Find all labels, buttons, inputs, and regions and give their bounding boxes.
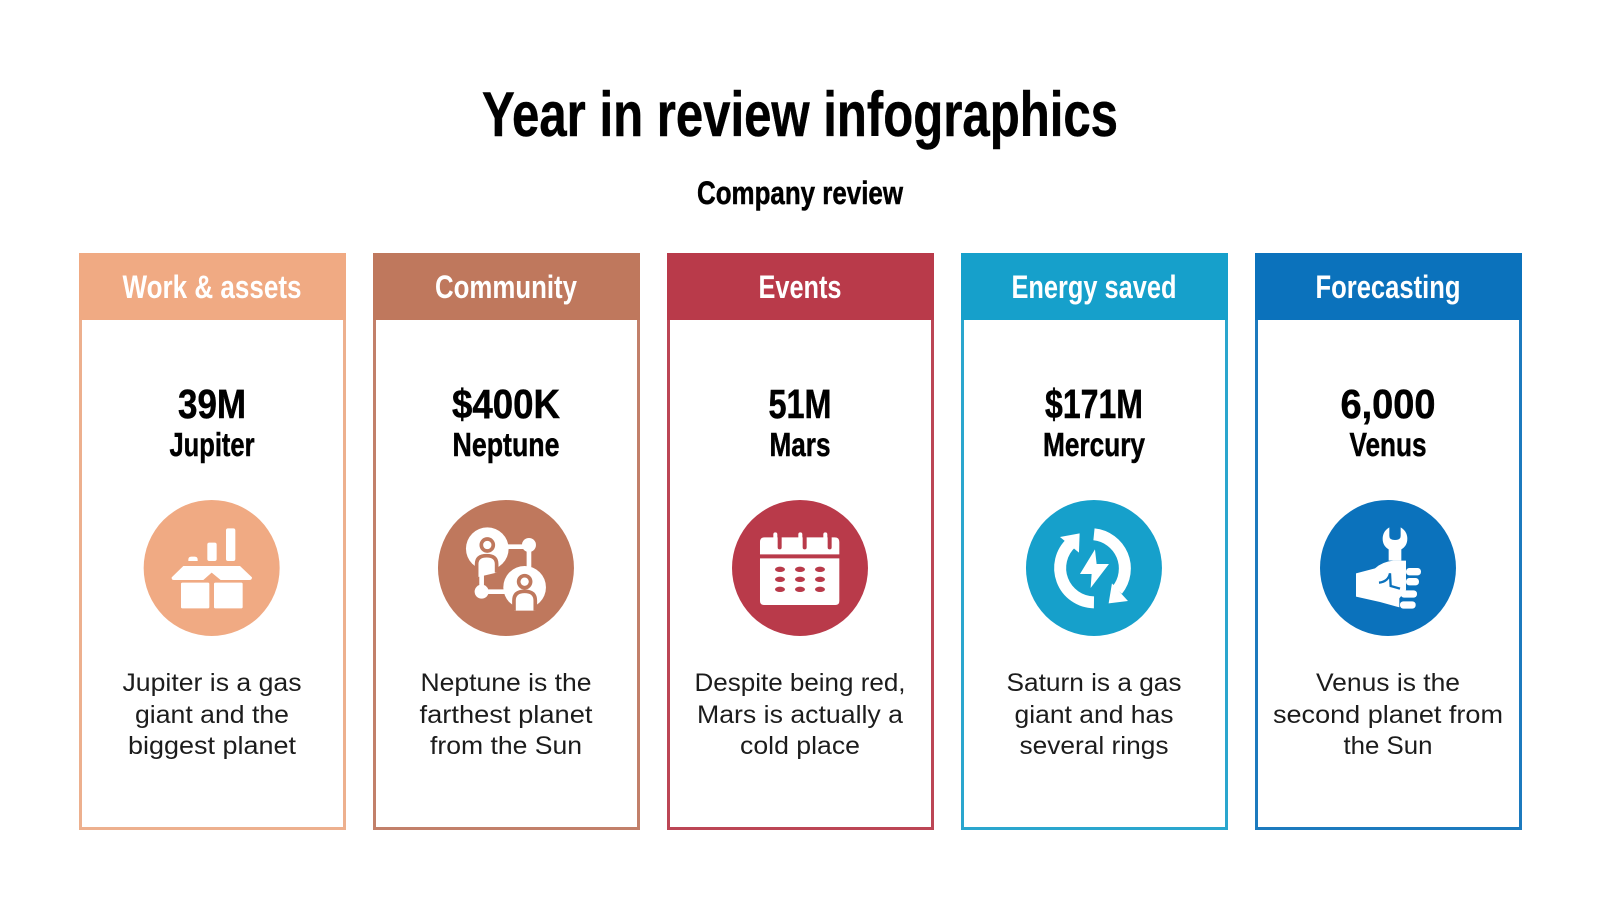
panel: work and assets — [79, 253, 346, 828]
description: several rings — [1020, 732, 1168, 760]
panel: events — [667, 253, 934, 828]
stat: $171M Mercury: $171M — [1045, 381, 1143, 427]
description: cold place — [740, 732, 860, 760]
stat: 39M Jupiter: Jupiter — [170, 426, 255, 463]
header: community: Community — [435, 269, 577, 305]
header: community — [373, 253, 640, 320]
icon: connected people — [438, 500, 574, 636]
stat: 6,000 Venus: Venus — [1350, 426, 1426, 463]
stat: $171M Mercury — [1043, 381, 1146, 463]
description — [694, 669, 906, 760]
panel: energy saved — [961, 253, 1228, 828]
stat: 51M Mars: 51M — [768, 381, 832, 427]
header: work and assets — [79, 253, 346, 320]
description: the Sun — [1344, 732, 1432, 760]
description — [420, 669, 593, 760]
description: Jupiter is a gas — [122, 669, 302, 697]
icon: energy cycle — [1026, 500, 1162, 636]
stat: 6,000 Venus — [1340, 381, 1436, 463]
header: energy saved: Energy saved — [1012, 269, 1176, 305]
icon: hand holding wrench — [1320, 500, 1456, 636]
header: forecasting: Forecasting — [1316, 269, 1460, 305]
description: Saturn is a gas — [1006, 669, 1182, 697]
subtitle: Company review — [697, 175, 903, 211]
stat: 51M Mars — [768, 381, 832, 463]
header: forecasting — [1255, 253, 1522, 320]
description — [1006, 669, 1182, 760]
stat: $171M Mercury: Mercury — [1043, 426, 1146, 463]
description: giant and the — [135, 701, 289, 729]
header: events — [667, 253, 934, 320]
stat: $400K Neptune — [452, 381, 560, 463]
description — [1273, 669, 1503, 760]
description: Despite being red, — [694, 669, 906, 697]
stat: $400K Neptune: $400K — [452, 381, 560, 427]
stat: 39M Jupiter — [170, 381, 255, 463]
panel: forecasting — [1255, 253, 1522, 828]
title: Year in review infographics — [482, 80, 1118, 150]
description: Neptune is the — [420, 669, 592, 697]
description: giant and has — [1014, 701, 1174, 729]
header: events: Events — [758, 269, 842, 305]
description: Venus is the — [1316, 669, 1460, 697]
stat: 51M Mars: Mars — [770, 426, 830, 463]
icon: box with bars — [144, 500, 280, 636]
panel: community — [373, 253, 640, 828]
stat: $400K Neptune: Neptune — [452, 426, 560, 463]
description: farthest planet — [420, 701, 593, 729]
description: second planet from — [1273, 701, 1503, 729]
stat: 6,000 Venus: 6,000 — [1340, 381, 1436, 427]
description: biggest planet — [128, 732, 296, 760]
icon: calendar — [732, 500, 868, 636]
header: energy saved — [961, 253, 1228, 320]
header: work and assets: Work & assets — [122, 269, 302, 305]
description — [122, 669, 302, 760]
stat: 39M Jupiter: 39M — [178, 381, 246, 427]
description: Mars is actually a — [697, 701, 903, 729]
description: from the Sun — [430, 732, 582, 760]
